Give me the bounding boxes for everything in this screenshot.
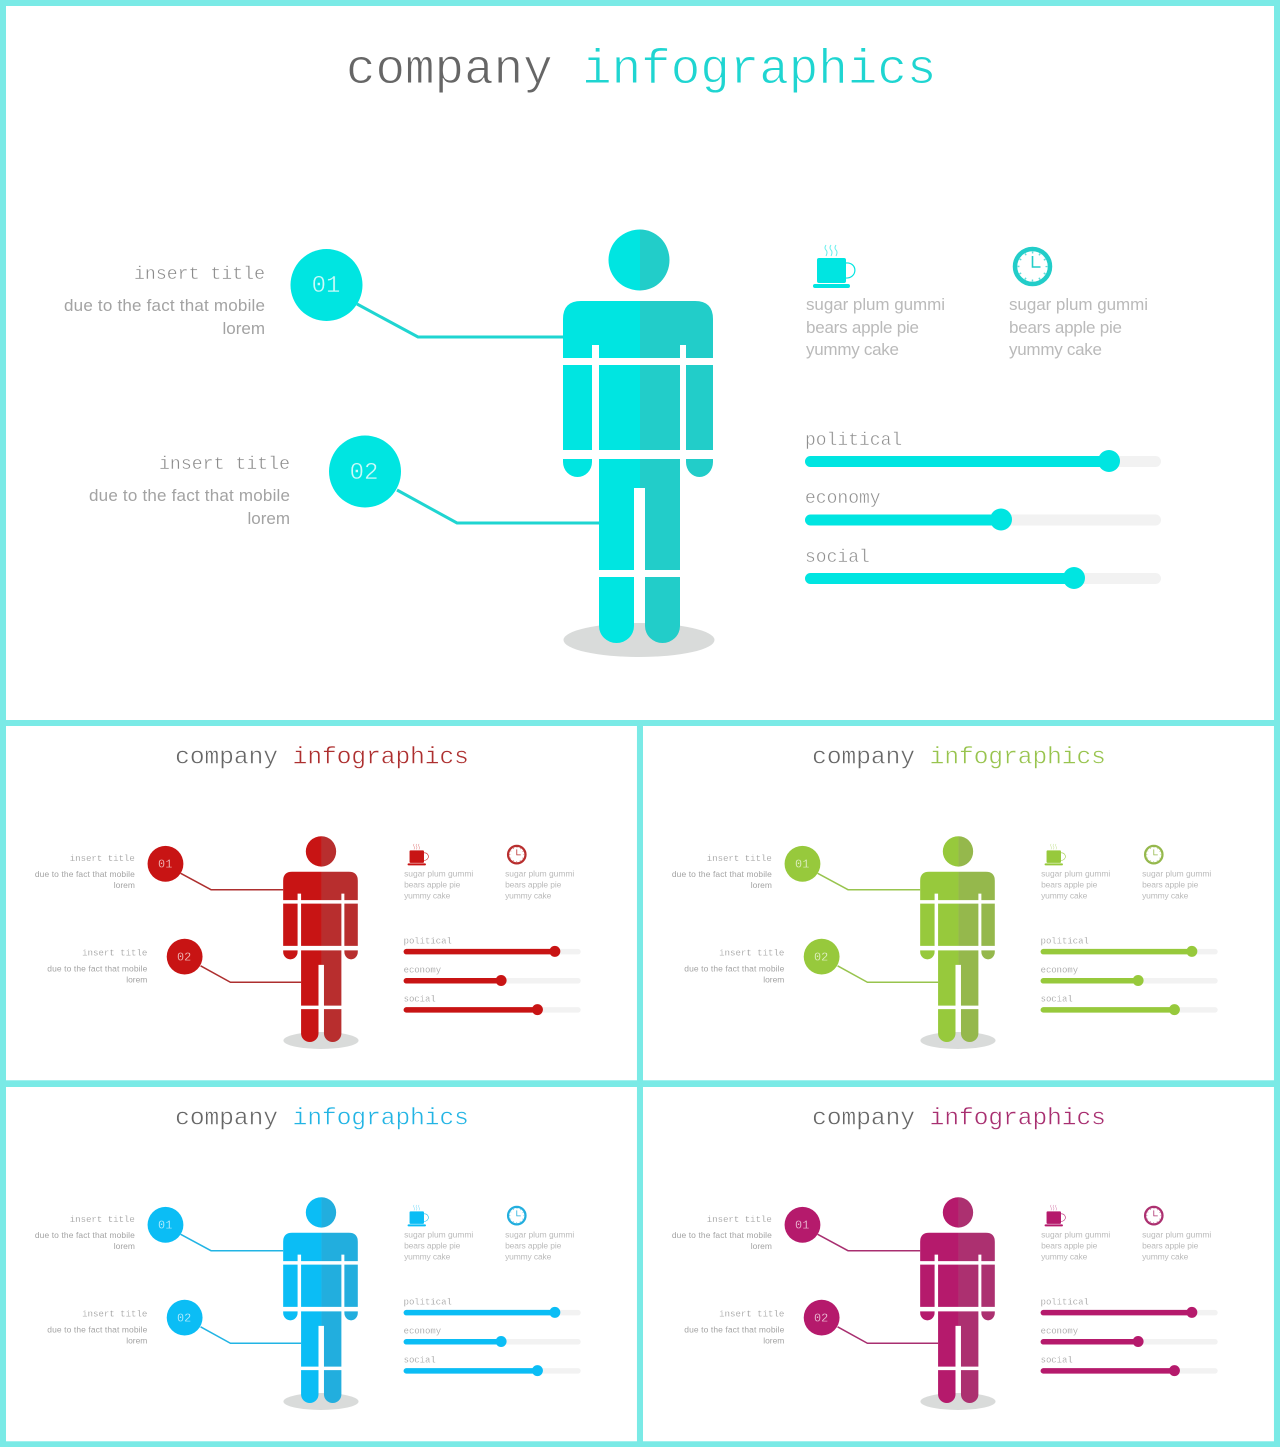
text: coffee note: bears apple pie <box>1041 880 1098 890</box>
icon: coffee cup <box>1045 1205 1065 1226</box>
text: clock note: sugar plum gummi <box>505 868 574 878</box>
callout 02 <box>684 939 938 985</box>
callout 01: 01 <box>312 273 340 300</box>
icon: clock <box>508 846 525 863</box>
callout 01: lorem <box>751 1241 772 1251</box>
text: clock note <box>1142 868 1211 901</box>
text: coffee note <box>404 868 473 901</box>
callout 01: insert title <box>70 1214 135 1225</box>
text: clock note: sugar plum gummi <box>1009 295 1148 314</box>
text: clock note <box>1009 295 1148 359</box>
callout 01: due to the fact that mobile <box>64 296 265 315</box>
callout 02: due to the fact that mobile <box>684 963 785 973</box>
callout 01: due to the fact that mobile <box>35 869 135 879</box>
callout 02: due to the fact that mobile <box>684 1324 785 1334</box>
title: company infographics <box>175 1105 469 1132</box>
callout 01 <box>35 846 283 890</box>
text: coffee note: sugar plum gummi <box>1041 1229 1110 1239</box>
bar: social <box>1041 1356 1218 1376</box>
bar: political <box>1041 936 1218 957</box>
icon: clock <box>1145 846 1162 863</box>
bar: social <box>805 548 1161 589</box>
bar: political <box>1041 1297 1218 1318</box>
person figure <box>563 230 714 657</box>
bar: economy <box>805 489 1161 530</box>
text: clock note <box>505 868 574 901</box>
text: coffee note: bears apple pie <box>404 880 461 890</box>
bar: political: political <box>404 936 452 946</box>
callout 01: due to the fact that mobile <box>35 1230 135 1240</box>
bar: economy <box>1041 965 1218 986</box>
callout 01 <box>672 846 920 890</box>
icon: coffee cup <box>408 1205 428 1226</box>
icon: clock <box>1145 1207 1162 1224</box>
panel: cyan main slide <box>6 6 1274 720</box>
callout 01: insert title <box>134 265 265 285</box>
person figure <box>283 836 359 1049</box>
callout 01: 01 <box>795 857 809 871</box>
text: clock note: bears apple pie <box>1142 880 1199 890</box>
callout 02 <box>47 939 301 985</box>
callout 02: lorem <box>126 975 147 985</box>
bar: political: political <box>1041 936 1089 946</box>
panel: green slide <box>643 726 1274 1080</box>
bar: political <box>404 936 581 957</box>
callout 01: 01 <box>158 1218 172 1232</box>
text: clock note: yummy cake <box>505 891 552 901</box>
callout 01: lorem <box>114 1241 135 1251</box>
panel: magenta slide <box>643 1087 1274 1441</box>
bar: economy <box>404 1326 581 1347</box>
bar: economy <box>404 965 581 986</box>
callout 01 <box>672 1207 920 1251</box>
bar: social: social <box>805 548 870 568</box>
callout 02 <box>89 436 599 528</box>
text: coffee note: yummy cake <box>1041 891 1088 901</box>
text: coffee note: bears apple pie <box>404 1241 461 1251</box>
title: company infographics <box>346 42 936 98</box>
text: coffee note: sugar plum gummi <box>1041 868 1110 878</box>
callout 01 <box>35 1207 283 1251</box>
text: clock note: bears apple pie <box>1142 1241 1199 1251</box>
callout 01: due to the fact that mobile <box>672 869 772 879</box>
callout 01: 01 <box>795 1218 809 1232</box>
callout 02: due to the fact that mobile <box>89 486 290 505</box>
bar: economy: economy <box>404 1326 442 1336</box>
text: coffee note <box>1041 868 1110 901</box>
bar: economy <box>1041 1326 1218 1347</box>
text: coffee note <box>404 1229 473 1262</box>
callout 02: lorem <box>247 509 290 528</box>
text: clock note: sugar plum gummi <box>505 1229 574 1239</box>
panel: blue slide <box>6 1087 637 1441</box>
bar: political <box>404 1297 581 1318</box>
bar: social: social <box>1041 995 1073 1005</box>
text: clock note: sugar plum gummi <box>1142 1229 1211 1239</box>
text: clock note: yummy cake <box>1142 891 1189 901</box>
text: clock note: sugar plum gummi <box>1142 868 1211 878</box>
callout 01 <box>64 249 563 338</box>
icon: clock <box>508 1207 525 1224</box>
text: coffee note: yummy cake <box>1041 1252 1088 1262</box>
callout 01: lorem <box>114 880 135 890</box>
callout 02: 02 <box>177 1311 191 1325</box>
callout 02: due to the fact that mobile <box>47 963 148 973</box>
title: company infographics <box>812 744 1106 771</box>
text: clock note <box>505 1229 574 1262</box>
callout 02: 02 <box>814 950 828 964</box>
bar: social: social <box>404 1356 436 1366</box>
text: coffee note: sugar plum gummi <box>806 295 945 314</box>
callout 02: lorem <box>763 975 784 985</box>
text: coffee note: yummy cake <box>404 891 451 901</box>
text: coffee note: bears apple pie <box>806 318 919 337</box>
callout 01: lorem <box>222 319 265 338</box>
callout 01: due to the fact that mobile <box>672 1230 772 1240</box>
icon: coffee cup <box>813 245 855 288</box>
callout 01: insert title <box>707 853 772 864</box>
text: clock note: bears apple pie <box>505 1241 562 1251</box>
callout 02 <box>684 1300 938 1346</box>
callout 02: lorem <box>126 1336 147 1346</box>
bar: economy: economy <box>404 965 442 975</box>
callout 02: 02 <box>350 460 378 487</box>
icon: clock <box>1015 249 1050 284</box>
callout 02: insert title <box>159 455 290 475</box>
panel: red slide <box>6 726 637 1080</box>
callout 02: insert title <box>719 947 784 958</box>
callout 02 <box>47 1300 301 1346</box>
text: clock note: bears apple pie <box>505 880 562 890</box>
text: coffee note <box>806 295 945 359</box>
bar: political: political <box>805 431 902 451</box>
text: clock note: yummy cake <box>505 1252 552 1262</box>
text: coffee note: sugar plum gummi <box>404 868 473 878</box>
callout 02: insert title <box>82 947 147 958</box>
callout 02: 02 <box>177 950 191 964</box>
callout 01: 01 <box>158 857 172 871</box>
text: coffee note <box>1041 1229 1110 1262</box>
bar: social <box>404 1356 581 1376</box>
title: company infographics <box>175 744 469 771</box>
text: coffee note: yummy cake <box>404 1252 451 1262</box>
icon: coffee cup <box>408 844 428 865</box>
callout 01: insert title <box>70 853 135 864</box>
text: clock note: yummy cake <box>1009 340 1102 359</box>
callout 02: insert title <box>719 1308 784 1319</box>
text: coffee note: sugar plum gummi <box>404 1229 473 1239</box>
text: clock note: yummy cake <box>1142 1252 1189 1262</box>
bar: social: social <box>1041 1356 1073 1366</box>
bar: social <box>404 995 581 1015</box>
bar: economy: economy <box>805 489 881 509</box>
person figure <box>283 1197 359 1410</box>
icon: coffee cup <box>1045 844 1065 865</box>
callout 02: 02 <box>814 1311 828 1325</box>
text: coffee note: yummy cake <box>806 340 899 359</box>
callout 01: lorem <box>751 880 772 890</box>
person figure <box>920 1197 996 1410</box>
text: clock note <box>1142 1229 1211 1262</box>
bar: social <box>1041 995 1218 1015</box>
title: company infographics <box>812 1105 1106 1132</box>
bar: social: social <box>404 995 436 1005</box>
callout 02: insert title <box>82 1308 147 1319</box>
callout 02: lorem <box>763 1336 784 1346</box>
bar: political: political <box>1041 1297 1089 1307</box>
person figure <box>920 836 996 1049</box>
bar: economy: economy <box>1041 1326 1079 1336</box>
bar: political: political <box>404 1297 452 1307</box>
text: clock note: bears apple pie <box>1009 318 1122 337</box>
bar: economy: economy <box>1041 965 1079 975</box>
bar: political <box>805 431 1161 472</box>
text: coffee note: bears apple pie <box>1041 1241 1098 1251</box>
callout 01: insert title <box>707 1214 772 1225</box>
callout 02: due to the fact that mobile <box>47 1324 148 1334</box>
